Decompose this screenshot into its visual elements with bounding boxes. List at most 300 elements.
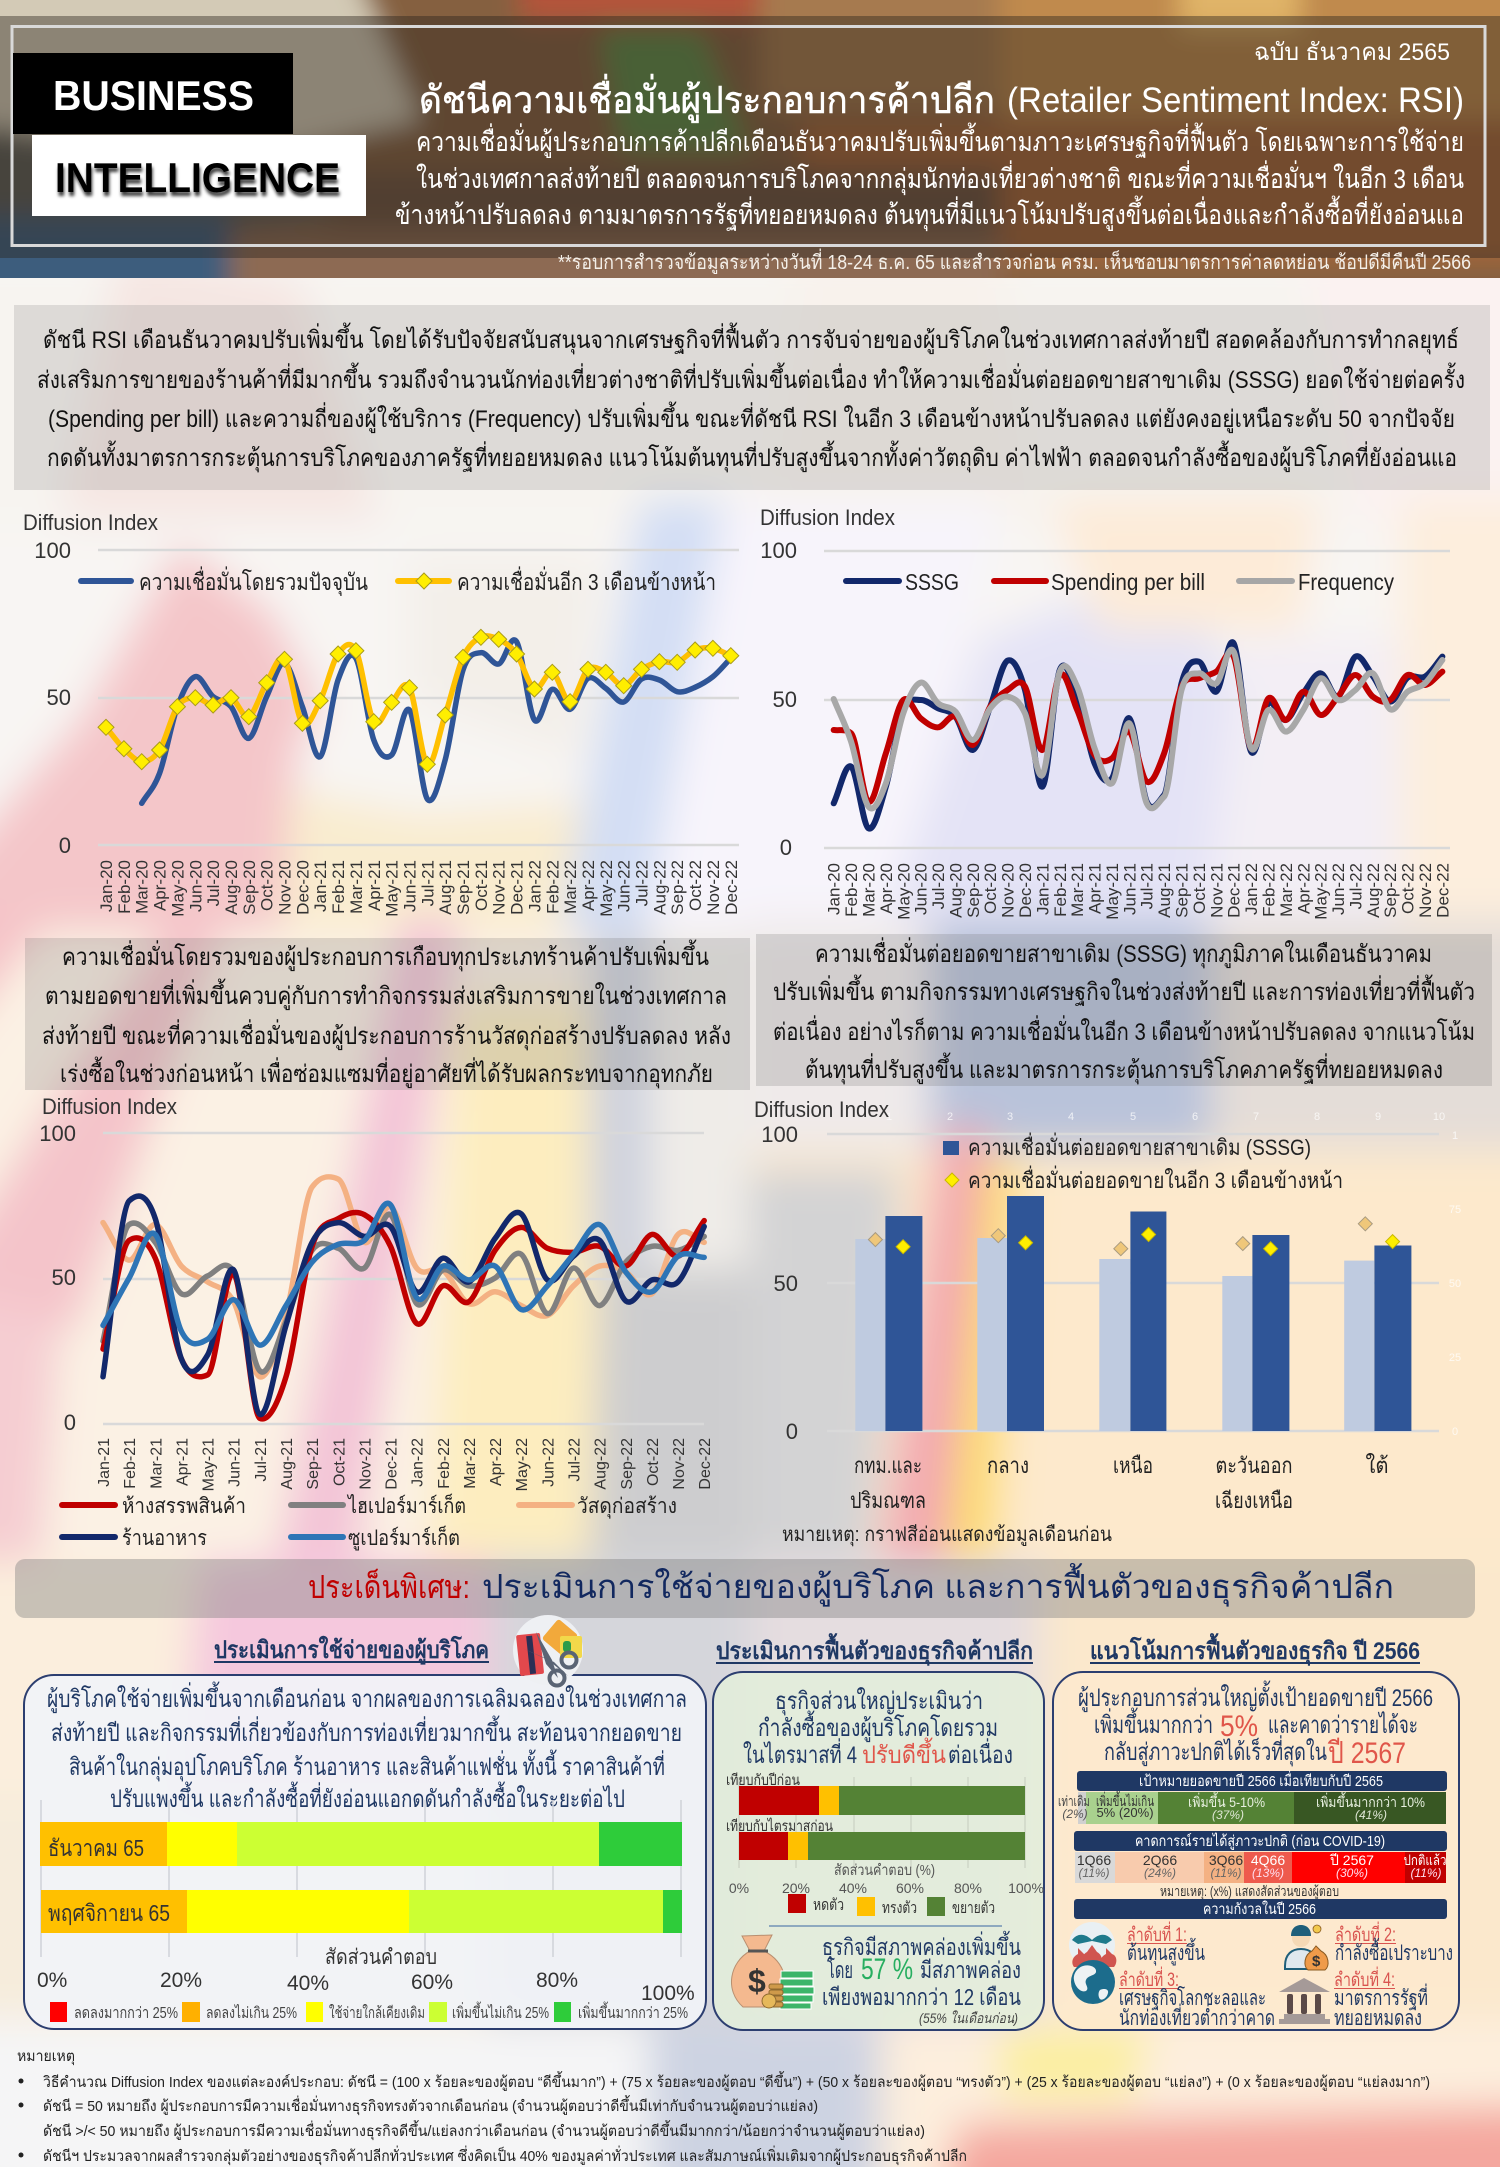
- axis title: Diffusion Index: [754, 1097, 889, 1122]
- concern 1: ต้นทุนสูงขึ้น: [1127, 1938, 1205, 1966]
- month labels: Aug-22: [1364, 863, 1383, 918]
- axis labels: 60%: [411, 1971, 453, 1994]
- month labels: Oct-22: [645, 1438, 662, 1486]
- month labels: Sep-20: [964, 863, 983, 918]
- legend: SSSG: [905, 569, 959, 595]
- panel text: ผู้บริโภคใช้จ่ายเพิ่มขึ้นจากเดือนก่อน จากผลของการเฉลิมฉลองในช่วงเทศกาล: [47, 1681, 687, 1714]
- stacked bar: normal income forecast: 1Q66: [1077, 1852, 1111, 1868]
- month labels: Feb-22: [543, 860, 562, 914]
- faint hidden axis numbers: 7: [1253, 1111, 1259, 1123]
- stacked bar: normal income forecast: 2Q66: [1143, 1852, 1177, 1868]
- panel: retail recovery: [713, 1672, 1044, 2030]
- legend: Frequency: [1298, 569, 1394, 595]
- header: normal income forecast: คาดการณ์รายได้สู่ภาวะปกติ (ก่อน COVID-19): [1135, 1832, 1385, 1850]
- legend: วัสดุก่อสร้าง: [577, 1495, 677, 1519]
- faint hidden axis numbers: 5: [1130, 1111, 1136, 1123]
- issue date: ฉบับ ธันวาคม 2565: [1254, 39, 1450, 66]
- stacked bar: sales target: (41%): [1355, 1808, 1387, 1822]
- legend: ความเชื่อมั่นต่อยอดขายสาขาเดิม (SSSG): [968, 1132, 1311, 1160]
- axis labels: [729, 1862, 1044, 1896]
- stacked bar: sales target: เพิ่มขึ้นมากกว่า 10%: [1316, 1792, 1425, 1810]
- month labels: Oct-22: [1399, 863, 1418, 914]
- month labels: Apr-21: [174, 1438, 191, 1486]
- faint hidden axis numbers: 3: [1007, 1111, 1013, 1123]
- month labels: Jun-22: [540, 1438, 557, 1487]
- month labels: Apr-20: [151, 860, 170, 911]
- legend: ลดลงไม่เกิน 25%: [206, 2004, 297, 2022]
- month labels: Apr-22: [488, 1438, 505, 1486]
- legend: [943, 1132, 1343, 1193]
- stacked bar: normal income forecast: (11%): [1410, 1866, 1442, 1880]
- axis labels: 100%: [641, 1982, 695, 2005]
- concern 4: ทยอยหมดลง: [1334, 2007, 1422, 2030]
- footer notes: ดัชนีฯ ประมวลจากผลสำรวจกลุ่มตัวอย่างของธุรกิจค้าปลีกทั่วประเทศ ซึ่งคิดเป็น 40% ของมูลค่าทั่วประเทศ และสัมภาษณ์เพิ่มเติมจากผู้ประกอบธุรกิจค้าปลีก: [43, 2145, 967, 2166]
- footer notes: ดัชนี >/< 50 หมายถึง ผู้ประกอบการมีความเชื่อมั่นทางธุรกิจดีขึ้น/แย่ลงกว่าเดือนก่อน (จำนวนผู้ตอบว่าดีขึ้นมีมากกว่า/น้อยกว่าจำนวนผู้ตอบว่าแย่ลง): [43, 2120, 925, 2141]
- month labels: Oct-21: [472, 860, 491, 911]
- liquidity text: 57 %: [861, 1953, 913, 1986]
- month labels: Nov-22: [671, 1438, 688, 1490]
- panel text: ต่อเนื่อง: [948, 1738, 1013, 1769]
- month labels: Jun-20: [186, 860, 205, 912]
- panel text: เพิ่มขึ้นมากกว่า: [1094, 1707, 1213, 1739]
- region labels: กทม.และ: [854, 1453, 922, 1478]
- legend: ความเชื่อมั่นต่อยอดขายในอีก 3 เดือนข้างหน้า: [968, 1165, 1343, 1193]
- month labels: Dec-21: [508, 860, 527, 915]
- liquidity text: (55% ในเดือนก่อน): [919, 2010, 1018, 2026]
- series: frequency: [834, 650, 1442, 808]
- legend: [846, 569, 1394, 595]
- month labels: May-20: [168, 860, 187, 917]
- stacked bars: เทียบกับปีก่อน: [726, 1772, 800, 1789]
- month labels: Nov-21: [490, 860, 509, 915]
- month labels: Jun-21: [227, 1438, 244, 1487]
- series: SSSG: [834, 642, 1442, 829]
- liquidity text: เพียงพอมากกว่า 12 เดือน: [822, 1984, 1021, 2010]
- faint hidden axis numbers: 6: [1192, 1111, 1198, 1123]
- month labels: Sep-20: [240, 860, 259, 915]
- stacked bar: normal income forecast: (13%): [1252, 1866, 1284, 1880]
- axis labels: 20%: [160, 1969, 202, 1992]
- stacked bar: sales target: เพิ่มขึ้น 5-10%: [1188, 1792, 1265, 1810]
- region labels: ปริมณฑล: [850, 1488, 926, 1513]
- month labels: Oct-20: [981, 863, 1000, 914]
- month labels: Dec-22: [1433, 863, 1452, 918]
- panel: 2023 outlook: [1053, 1672, 1459, 2030]
- axis title: Diffusion Index: [760, 505, 895, 530]
- month labels: Apr-21: [1086, 863, 1105, 914]
- month labels: May-21: [383, 860, 402, 917]
- legend: [50, 2001, 688, 2022]
- logo: BUSINESS: BUSINESS: [53, 72, 254, 119]
- header: sales target: เป้าหมายยอดขายปี 2566 เมื่อเทียบกับปี 2565: [1139, 1770, 1383, 1790]
- header: concerns: ความกังวลในปี 2566: [1203, 1900, 1316, 1918]
- stacked bar: normal income forecast: 4Q66: [1251, 1852, 1285, 1868]
- stacked bar: sales target: [1058, 1791, 1446, 1824]
- stacked bars: ธันวาคม 65: [48, 1835, 144, 1861]
- concern 3: นักท่องเที่ยวต่ำกว่าคาด: [1119, 2003, 1275, 2030]
- legend: ลดลงมากกว่า 25%: [74, 2005, 178, 2022]
- axis labels: สัดส่วนคำตอบ (%): [834, 1862, 935, 1879]
- legend: ร้านอาหาร: [122, 1527, 207, 1550]
- month labels: Mar-21: [148, 1438, 165, 1489]
- panel text: สินค้าในกลุ่มอุปโภคบริโภค ร้านอาหาร และสินค้าแฟชั่น ทั้งนี้ ราคาสินค้าที่: [69, 1749, 665, 1782]
- logo: BUSINESS: [13, 53, 293, 134]
- axis labels: 40%: [287, 1972, 329, 1995]
- series: hypermarket: [103, 1214, 704, 1372]
- month labels: Mar-21: [347, 860, 366, 914]
- panel text: ส่งท้ายปี และกิจกรรมที่เกี่ยวข้องกับการท่องเที่ยวมากขึ้น สะท้อนจากยอดขาย: [51, 1715, 682, 1747]
- panel text: ปรับแพงขึ้น และกำลังซื้อที่ยังอ่อนแอกดดันกำลังซื้อในระยะต่อไป: [110, 1781, 625, 1813]
- stacked bar: normal income forecast: [1075, 1852, 1446, 1883]
- month labels: May-22: [1312, 863, 1331, 920]
- legend: [81, 566, 716, 596]
- axis title: Diffusion Index: [42, 1094, 177, 1119]
- title: (Retailer Sentiment Index: RSI): [1007, 81, 1464, 120]
- month labels: Jun-22: [615, 860, 634, 912]
- y axis ticks: [760, 538, 797, 860]
- faint hidden axis numbers: 2: [947, 1111, 953, 1123]
- stacked bars: [40, 1800, 682, 1957]
- legend: เพิ่มขึ้นไม่เกิน 25%: [452, 2001, 549, 2022]
- region labels: เฉียงเหนือ: [1215, 1488, 1293, 1513]
- special topic banner: ประเด็นพิเศษ:: [308, 1568, 470, 1605]
- panel: store type commentary: ความเชื่อมั่นโดยรวมของผู้ประกอบการเกือบทุกประเภทร้านค้าปรับเพิ่มขึ้น: [62, 939, 709, 972]
- month labels: Mar-22: [1277, 863, 1296, 917]
- line chart: SSSG, spending per bill, frequency: [760, 505, 1452, 920]
- panel text: ธุรกิจส่วนใหญ่ประเมินว่า: [775, 1687, 983, 1716]
- month labels: Oct-21: [1190, 863, 1209, 914]
- axis labels: 60%: [896, 1880, 924, 1896]
- logo: INTELLIGENCE: [32, 135, 366, 216]
- month labels: Jun-22: [1329, 863, 1348, 915]
- faint hidden axis numbers: 25: [1449, 1352, 1461, 1364]
- region labels: กลาง: [987, 1453, 1029, 1478]
- faint hidden axis numbers: 75: [1449, 1204, 1461, 1216]
- stacked bar: sales target: 5% (20%): [1096, 1805, 1154, 1820]
- axis title: Diffusion Index: [23, 510, 158, 535]
- region labels: ตะวันออก: [1216, 1453, 1292, 1478]
- concern 4: ลำดับที่ 4:: [1334, 1966, 1395, 1991]
- header: normal income forecast: [1074, 1831, 1447, 1851]
- panel: store type commentary: ตามยอดขายที่เพิ่มขึ้นควบคู่กับการทำกิจกรรมส่งเสริมการขายในช่วงเทศกาล: [45, 978, 727, 1011]
- icon: person with money: [1285, 1925, 1328, 1970]
- axis labels: สัดส่วนคำตอบ: [325, 1946, 437, 1969]
- month labels: Feb-20: [115, 860, 134, 914]
- concern 2: ลำดับที่ 2:: [1335, 1921, 1396, 1946]
- month labels: Nov-22: [704, 860, 723, 915]
- panel text: กลับสู่ภาวะปกติได้เร็วที่สุดใน: [1104, 1735, 1327, 1767]
- month labels: Aug-20: [946, 863, 965, 918]
- month labels: Aug-22: [593, 1438, 610, 1490]
- heading: 2023 outlook: แนวโน้มการฟื้นตัวของธุรกิจ ปี 2566: [1090, 1632, 1420, 1667]
- bar chart: by region: [754, 1097, 1461, 1547]
- y axis ticks: 0: [64, 1410, 76, 1435]
- month labels: [825, 863, 1452, 920]
- icon: cost bags: [1069, 1922, 1116, 1968]
- liquidity text: [822, 1931, 1021, 2026]
- stacked bar: normal income forecast: (30%): [1336, 1866, 1368, 1880]
- month labels: Sep-21: [454, 860, 473, 915]
- month labels: Feb-22: [1260, 863, 1278, 917]
- month labels: Nov-20: [276, 860, 294, 915]
- month labels: Jul-20: [929, 863, 948, 909]
- month labels: Feb-21: [122, 1438, 139, 1489]
- faint hidden axis numbers: 10: [1433, 1111, 1445, 1123]
- concern 2: [1335, 1921, 1453, 1965]
- concern 1: [1127, 1921, 1205, 1966]
- month labels: Nov-22: [1416, 863, 1435, 918]
- month labels: Aug-21: [436, 860, 455, 915]
- footer notes: ดัชนี = 50 หมายถึง ผู้ประกอบการมีความเชื่อมั่นทางธุรกิจทรงตัวจากเดือนก่อน (จำนวนผู้ตอบว่าดีขึ้นมีเท่ากับจำนวนผู้ตอบว่าแย่ลง): [43, 2095, 818, 2116]
- month labels: Aug-20: [222, 860, 241, 915]
- legend: ทรงตัว: [882, 1900, 917, 1917]
- stacked bars: พฤศจิกายน 65: [48, 1900, 170, 1926]
- month labels: Oct-21: [331, 1438, 348, 1486]
- y axis ticks: 100: [39, 1121, 76, 1146]
- axis labels: 0%: [729, 1880, 749, 1896]
- month labels: Nov-20: [999, 863, 1018, 918]
- month labels: May-22: [597, 860, 616, 917]
- month labels: Jan-21: [311, 860, 330, 912]
- month labels: Jan-20: [97, 860, 116, 912]
- liquidity text: โดย: [827, 1957, 853, 1983]
- month labels: Feb-22: [436, 1438, 453, 1489]
- legend: หดตัว: [813, 1897, 844, 1914]
- month labels: [97, 860, 741, 917]
- month labels: [96, 1438, 714, 1491]
- stacked bar: sales target: เพิ่มขึ้นไม่เกิน: [1096, 1791, 1154, 1809]
- month labels: Jan-21: [96, 1438, 113, 1487]
- axis labels: 20%: [782, 1880, 810, 1896]
- month labels: Jun-21: [400, 860, 420, 912]
- faint hidden axis numbers: 50: [1449, 1278, 1461, 1290]
- header frame: [12, 26, 1485, 246]
- concern 4: [1334, 1966, 1428, 2030]
- month labels: May-22: [514, 1438, 531, 1491]
- logo: INTELLIGENCE: INTELLIGENCE: [55, 154, 340, 201]
- y axis ticks: 0: [59, 833, 71, 858]
- legend: [788, 1894, 995, 1917]
- month labels: Dec-22: [722, 860, 741, 915]
- y axis ticks: 100: [761, 1122, 798, 1147]
- month labels: Dec-21: [1225, 863, 1244, 918]
- panel text: [743, 1687, 1013, 1769]
- stacked bar: normal income forecast: (11%): [1078, 1866, 1110, 1880]
- month labels: Mar-22: [561, 860, 580, 914]
- legend: ห้างสรรพสินค้า: [122, 1495, 246, 1518]
- stacked bar: sales target: (37%): [1212, 1808, 1244, 1822]
- month labels: May-20: [894, 863, 913, 920]
- month labels: Jan-21: [1033, 863, 1052, 915]
- special topic banner: [15, 1559, 1475, 1618]
- month labels: Jul-21: [418, 860, 437, 906]
- stacked bar: sales target: เท่าเดิม: [1058, 1793, 1090, 1809]
- stacked bar: normal income forecast: (24%): [1144, 1866, 1176, 1880]
- month labels: Dec-21: [384, 1438, 400, 1490]
- region labels: [850, 1453, 1388, 1513]
- axis labels: [37, 1946, 695, 2005]
- month labels: Dec-20: [1016, 863, 1035, 918]
- series: department store: [103, 1212, 704, 1419]
- series: 3-month ahead confidence: [106, 636, 731, 765]
- month labels: Nov-21: [1207, 863, 1226, 918]
- footer notes: วิธีคำนวณ Diffusion Index ของแต่ละองค์ประกอบ: ดัชนี = (100 x ร้อยละของผู้ตอบ “ดีขึ้นมาก”) + (75 x ร้อยละของผู้ตอบ “ดีขึ้น”) + (50 x ร้อยละของผู้ตอบ “ทรงตัว”) + (25 x ร้อยละของผู้ตอบ “แย่ลง”) + (0 x ร้อยละของผู้ตอบ “แย่ลงมาก”): [42, 2071, 1430, 2091]
- axis labels: 80%: [954, 1880, 982, 1896]
- y axis ticks: 100: [760, 538, 797, 563]
- stacked bar: normal income forecast: 3Q66: [1209, 1852, 1243, 1868]
- month labels: Mar-21: [1068, 863, 1087, 917]
- icon: credit card and scissors: [513, 1615, 583, 1686]
- month labels: Aug-21: [279, 1438, 296, 1490]
- month labels: Sep-22: [619, 1438, 636, 1490]
- legend: ความเชื่อมั่นอีก 3 เดือนข้างหน้า: [457, 566, 716, 595]
- stacked bars: [726, 1772, 1025, 1868]
- diamonds: previous month outlook: [868, 1217, 1372, 1256]
- month labels: Apr-21: [365, 860, 384, 911]
- concern 1: ลำดับที่ 1:: [1127, 1921, 1187, 1946]
- legend: Spending per bill: [1051, 569, 1205, 595]
- liquidity text: มีสภาพคล่อง: [920, 1957, 1021, 1983]
- footer notes: หมายเหตุ: [17, 2048, 75, 2066]
- note: หมายเหตุ: (x%) แสดงสัดส่วนของผู้ตอบ: [1160, 1883, 1339, 1900]
- legend: [62, 1492, 677, 1551]
- panel text: 5%: [1220, 1710, 1258, 1743]
- month labels: Aug-22: [650, 860, 669, 915]
- series: construction materials: [103, 1177, 704, 1377]
- faint hidden axis numbers: 1: [886, 1111, 892, 1123]
- faint hidden axis numbers: [886, 1111, 1461, 1438]
- diamond markers: [106, 637, 731, 764]
- month labels: Dec-20: [293, 860, 312, 915]
- month labels: Jan-22: [525, 860, 544, 912]
- legend: ความเชื่อมั่นโดยรวมปัจจุบัน: [139, 566, 368, 596]
- icon: person with money: $: [1312, 1953, 1321, 1970]
- month labels: Jun-20: [912, 863, 931, 915]
- month labels: Apr-22: [579, 860, 598, 911]
- month labels: May-21: [1103, 863, 1122, 920]
- faint hidden axis numbers: 1: [1452, 1130, 1458, 1142]
- region labels: เหนือ: [1113, 1453, 1153, 1478]
- legend: ใช้จ่ายใกล้เคียงเดิม: [329, 2004, 425, 2022]
- month labels: May-21: [201, 1438, 218, 1491]
- axis labels: 0%: [37, 1969, 67, 1992]
- month labels: Mar-20: [860, 863, 878, 917]
- axis labels: 40%: [839, 1880, 867, 1896]
- diamonds: current outlook: [896, 1228, 1400, 1256]
- panel text: และคาดว่ารายได้จะ: [1268, 1711, 1418, 1739]
- y axis ticks: 50: [774, 1271, 798, 1296]
- month labels: Jul-20: [204, 860, 223, 906]
- faint hidden axis numbers: 9: [1375, 1111, 1381, 1123]
- liquidity text: ธุรกิจมีสภาพคล่องเพิ่มขึ้น: [822, 1931, 1021, 1961]
- series: supermarket: [103, 1203, 704, 1345]
- y axis ticks: [34, 538, 71, 858]
- stacked bars: เทียบกับไตรมาสก่อน: [726, 1817, 833, 1835]
- concern 3: [1119, 1966, 1275, 2030]
- chart note: หมายเหตุ: กราฟสีอ่อนแสดงข้อมูลเดือนก่อน: [782, 1524, 1112, 1547]
- header: sales target: [1077, 1770, 1447, 1791]
- month labels: Jan-20: [825, 863, 844, 915]
- faint hidden axis numbers: 0: [1452, 1426, 1458, 1438]
- legend: เพิ่มขึ้นมากกว่า 25%: [578, 2001, 688, 2022]
- faint hidden axis numbers: 8: [1314, 1111, 1320, 1123]
- month labels: Sep-21: [305, 1438, 322, 1490]
- panel text: ปรับดีขึ้น: [862, 1737, 946, 1769]
- month labels: Aug-21: [1155, 863, 1174, 918]
- month labels: Jun-21: [1120, 863, 1139, 915]
- icon: globe: [1071, 1960, 1115, 2004]
- month labels: Jul-21: [1138, 863, 1157, 909]
- footer notes: [17, 2048, 1430, 2166]
- header photo background: [0, 0, 1500, 278]
- month labels: Dec-22: [697, 1438, 714, 1490]
- stacked bar: normal income forecast: (11%): [1210, 1866, 1242, 1880]
- month labels: Feb-21: [1051, 863, 1070, 917]
- month labels: Sep-22: [1381, 863, 1400, 918]
- y axis ticks: 50: [773, 687, 797, 712]
- stacked bar: normal income forecast: ปกติแล้ว: [1404, 1852, 1446, 1868]
- concern 4: มาตรการรัฐที่: [1334, 1983, 1428, 2010]
- region labels: ใต้: [1366, 1453, 1388, 1478]
- heading: consumer spending: ประเมินการใช้จ่ายของผู้บริโภค: [214, 1635, 489, 1665]
- month labels: Jul-22: [632, 860, 652, 906]
- series: current confidence: [142, 640, 731, 803]
- header summary text: [395, 122, 1464, 232]
- month labels: Apr-22: [1294, 863, 1313, 914]
- legend: ขยายตัว: [952, 1900, 995, 1917]
- y axis ticks: 50: [52, 1265, 76, 1290]
- legend: ไฮเปอร์มาร์เก็ต: [346, 1492, 466, 1518]
- panel: main summary: [14, 305, 1490, 490]
- concern 2: กำลังซื้อเปราะบาง: [1335, 1938, 1453, 1965]
- month labels: Mar-20: [133, 860, 152, 914]
- month labels: Oct-20: [258, 860, 277, 911]
- axis labels: 100%: [1008, 1880, 1044, 1896]
- header dark overlay: [0, 16, 1500, 258]
- concern 3: ลำดับที่ 3:: [1119, 1966, 1179, 1991]
- month labels: Sep-21: [1172, 863, 1192, 918]
- month labels: Jul-22: [566, 1438, 584, 1482]
- stacked bar: normal income forecast: ปี 2567: [1330, 1852, 1374, 1868]
- y axis ticks: 50: [47, 685, 71, 710]
- panel: consumer spending: [24, 1675, 706, 2029]
- bars: current month: [885, 1196, 1411, 1431]
- header: concerns: [1074, 1899, 1447, 1919]
- y axis ticks: 0: [780, 835, 792, 860]
- line chart: by store type: [39, 1094, 714, 1551]
- y axis ticks: 100: [34, 538, 71, 563]
- legend: ซูเปอร์มาร์เก็ต: [348, 1524, 460, 1551]
- icon: money bag and cash: [731, 1935, 814, 2009]
- panel text: ในไตรมาสที่ 4: [743, 1738, 857, 1769]
- panel: store type commentary: [25, 938, 750, 1090]
- month labels: Mar-22: [462, 1438, 479, 1489]
- panel: store type commentary: ส่งท้ายปี ขณะที่ความเชื่อมั่นของผู้ประกอบการร้านวัสดุก่อสร้างปรับลดลง หลัง: [42, 1019, 731, 1051]
- icon: government building: [1279, 1978, 1330, 2024]
- month labels: Apr-20: [877, 863, 896, 914]
- month labels: Oct-22: [686, 860, 705, 911]
- month labels: Sep-22: [668, 860, 687, 915]
- month labels: Nov-21: [357, 1438, 374, 1490]
- panel text: [1078, 1680, 1433, 1770]
- y axis ticks: [761, 1122, 798, 1444]
- panel text: ปี 2567: [1327, 1737, 1406, 1770]
- month labels: Feb-21: [329, 860, 348, 914]
- line chart: overall confidence: [23, 510, 741, 917]
- month labels: Jan-22: [1242, 863, 1261, 915]
- series: spending per bill: [834, 653, 1442, 802]
- title: [419, 74, 1464, 123]
